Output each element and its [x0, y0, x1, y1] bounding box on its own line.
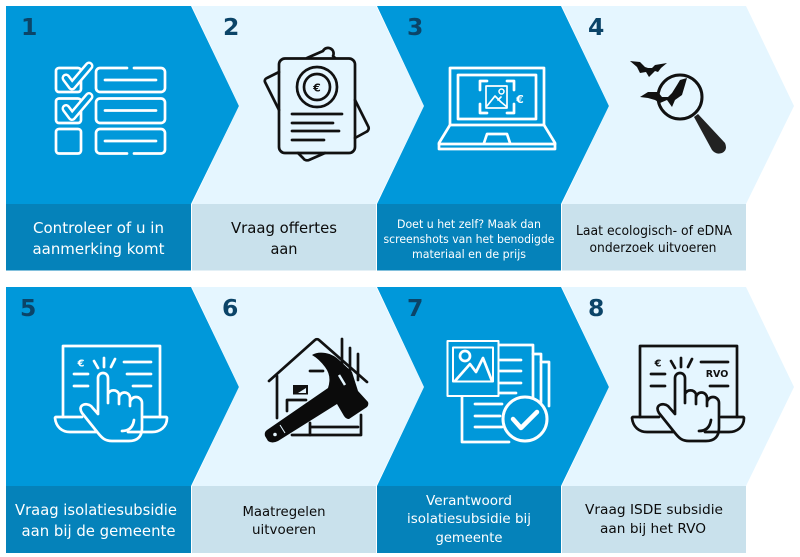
step 2 panel: 2 — [223, 13, 239, 41]
icon: laptop with screenshot: € — [515, 93, 524, 106]
step 2 panel — [192, 6, 424, 270]
icon: house with hammer — [265, 339, 368, 442]
icon: magnifying glass with bats — [630, 61, 726, 154]
icon: hand clicking on laptop with RVO: RVO — [706, 369, 728, 380]
icon: hand clicking on laptop with RVO — [632, 346, 744, 441]
step 3 panel: screenshots van het benodigde — [384, 232, 554, 246]
step 3 panel: Doet u het zelf? Maak dan — [397, 217, 541, 231]
step 8 panel: aan bij het RVO — [600, 521, 706, 537]
step 6 panel: 6 — [222, 294, 238, 322]
step 7 panel: isolatiesubsidie bij — [407, 511, 531, 527]
step 6 panel — [192, 287, 424, 553]
step 1 panel: Controleer of u in — [33, 219, 164, 237]
step 6 panel: Maatregelen — [242, 505, 326, 520]
icon: checklist — [56, 66, 165, 154]
icon: hand clicking on laptop with RVO: € — [654, 358, 662, 370]
icon: documents with photo and checkmark — [448, 341, 549, 442]
step 8 panel — [562, 287, 794, 553]
step 4 panel: 4 — [588, 13, 604, 41]
icon: quotation documents: € — [312, 82, 321, 94]
icon: quotation documents — [265, 48, 369, 160]
icon: hand clicking on laptop with euro: € — [77, 358, 85, 370]
icon: hand clicking on laptop with euro — [55, 346, 167, 441]
step 1 panel: aanmerking komt — [32, 240, 165, 258]
step 7 panel: Verantwoord — [426, 493, 512, 509]
step 7 panel: 7 — [407, 294, 423, 322]
step 5 panel — [6, 287, 239, 553]
step 5 panel: Vraag isolatiesubsidie — [15, 501, 177, 519]
step 8 panel: Vraag ISDE subsidie — [585, 502, 723, 518]
step 2 panel: aan — [270, 240, 298, 258]
step 3 panel — [377, 6, 609, 270]
step 4 panel: Laat ecologisch- of eDNA — [576, 224, 732, 239]
step 1 panel — [6, 6, 239, 270]
step 1 panel: 1 — [21, 13, 37, 41]
step 4 panel — [562, 6, 794, 270]
step 2 panel: Vraag offertes — [231, 219, 337, 237]
step 8 panel: 8 — [588, 294, 604, 322]
step 3 panel: materiaal en de prijs — [412, 247, 526, 261]
step 4 panel: onderzoek uitvoeren — [590, 241, 716, 256]
step 6 panel: uitvoeren — [252, 523, 316, 538]
step 5 panel: 5 — [20, 294, 36, 322]
step 3 panel: 3 — [407, 13, 423, 41]
icon: laptop with screenshot — [439, 68, 555, 149]
step 7 panel — [377, 287, 609, 553]
step 7 panel: gemeente — [436, 530, 502, 546]
step 5 panel: aan bij de gemeente — [22, 522, 176, 540]
